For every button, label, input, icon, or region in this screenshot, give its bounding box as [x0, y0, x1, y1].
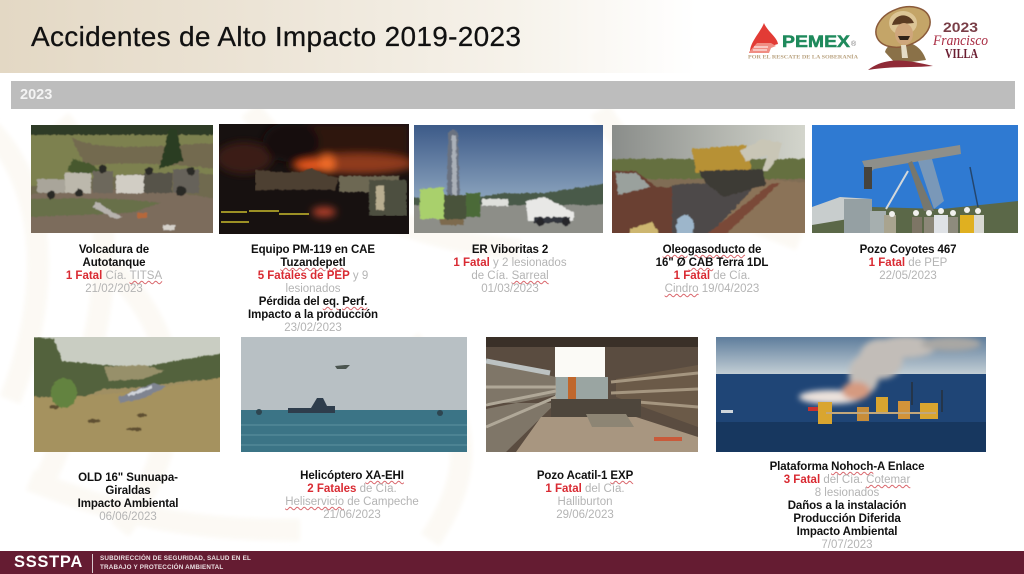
title: Accidentes de Alto Impacto 2019-2023: [31, 21, 521, 52]
caption: Equipo PM-119: Tuzandepetl: [280, 257, 346, 269]
icon: portrait with sombrero: [868, 0, 936, 70]
icon: Pemex drop and eagle: [749, 23, 778, 53]
logo: 2023 Francisco Villa: [868, 6, 988, 70]
caption: Helicóptero XA-EHI: [285, 470, 419, 521]
caption: Oleogasoducto: 16" Ø CAB Terra 1DL: [656, 257, 768, 269]
caption: OLD 16 Sunuapa-Giraldas: Giraldas: [105, 485, 151, 497]
caption: ER Viboritas 2: [453, 244, 567, 295]
photo: Pozo Acatil interior: [486, 337, 698, 452]
caption: Volcadura de Autotanque: [66, 244, 162, 295]
caption: Plataforma Nohoch-A Enlace: Impacto Ambiental: [797, 526, 897, 538]
caption: Equipo PM-119: Pérdida del eq. Perf.: [259, 296, 367, 308]
caption: Pozo Acatil-1 EXP: Pozo Acatil-1 EXP: [537, 470, 633, 482]
caption: ER Viboritas 2: ER Viboritas 2: [472, 244, 548, 256]
caption: Pozo Coyotes 467: [860, 244, 956, 282]
caption: Helicóptero XA-EHI: Helicóptero XA-EHI: [300, 470, 404, 482]
footer acronym: SSSTPA: [14, 553, 83, 571]
footer description: TRABAJO Y PROTECCIÓN AMBIENTAL: [100, 564, 223, 570]
caption: Oleogasoducto: [656, 244, 768, 298]
caption: Helicóptero XA-EHI: 21/06/2023: [323, 509, 381, 521]
footer divider: [92, 554, 93, 573]
caption: Plataforma Nohoch-A Enlace: 7/07/2023: [821, 539, 873, 551]
wordmark: PEMEX: [782, 32, 851, 51]
photo: pumpjack at Pozo Coyotes: [812, 125, 1018, 233]
caption: OLD 16 Sunuapa-Giraldas: OLD 16" Sunuapa-: [78, 472, 178, 484]
caption: Plataforma Nohoch-A Enlace: Daños a la instalación: [788, 500, 906, 512]
surname: VILLA: [945, 46, 978, 61]
caption: Equipo PM-119: lesionados: [286, 283, 340, 295]
year: 2023: [943, 19, 978, 35]
caption: Pozo Acatil-1 EXP: 1 Fatal del Cía.: [545, 483, 625, 495]
caption: Pozo Acatil-1 EXP: 29/06/2023: [556, 509, 614, 521]
photo: OLD 16 pipeline right of way: [34, 337, 220, 452]
photo: PM-119 rig fire at night: [219, 124, 409, 234]
footer bar: [0, 551, 1024, 574]
photo: overturned tanker: [31, 125, 213, 233]
caption: Pozo Coyotes 467: 22/05/2023: [879, 270, 937, 282]
caption: Equipo PM-119: 5 Fatales de PEP y 9: [258, 270, 368, 282]
caption: Helicóptero XA-EHI: 2 Fatales de Cía.: [307, 483, 397, 495]
photo: helicopter and vessel at sea: [241, 337, 467, 452]
caption: Pozo Acatil-1 EXP: Halliburton: [558, 496, 612, 508]
year label: 2023: [20, 87, 52, 103]
caption: Volcadura de Autotanque: Volcadura de: [79, 244, 149, 256]
caption: Oleogasoducto: Oleogasoducto de: [663, 244, 761, 256]
caption: Volcadura de Autotanque: 21/02/2023: [85, 283, 143, 295]
caption: Equipo PM-119: Equipo PM-119 en CAE: [251, 244, 375, 256]
caption: ER Viboritas 2: 01/03/2023: [481, 283, 539, 295]
caption: Plataforma Nohoch-A Enlace: 3 Fatal del Cía. Cotemar: [784, 474, 910, 486]
logo: Pemex: [748, 23, 858, 60]
photo: excavator over pipeline: [612, 125, 805, 233]
caption: Plataforma Nohoch-A Enlace: 8 lesionados: [815, 487, 879, 499]
caption: Volcadura de Autotanque: 1 Fatal Cía. TITSA: [66, 270, 162, 282]
caption: ER Viboritas 2: de Cía. Sarreal: [471, 270, 549, 282]
caption: Equipo PM-119: Impacto a la producción: [248, 309, 378, 321]
footer description: [100, 554, 251, 570]
caption: OLD 16 Sunuapa-Giraldas: 06/06/2023: [99, 511, 157, 523]
caption: OLD 16 Sunuapa-Giraldas: [78, 472, 178, 523]
caption: Oleogasoducto: 1 Fatal de Cía.: [674, 270, 750, 282]
caption: Plataforma Nohoch-A Enlace: [770, 461, 924, 551]
caption: Volcadura de Autotanque: Autotanque: [83, 257, 145, 269]
caption: Equipo PM-119: 23/02/2023: [284, 322, 342, 334]
caption: Pozo Coyotes 467: Pozo Coyotes 467: [860, 244, 956, 256]
caption: Equipo PM-119: [248, 244, 378, 334]
caption: Plataforma Nohoch-A Enlace: Producción Diferida: [793, 513, 901, 525]
script name: Francisco: [932, 33, 988, 49]
caption: ER Viboritas 2: 1 Fatal y 2 lesionados: [453, 257, 567, 269]
caption: Pozo Acatil-1 EXP: [537, 470, 634, 521]
tagline: POR EL RESCATE DE LA SOBERANÍA: [748, 52, 858, 60]
caption: Helicóptero XA-EHI: Heliservicio de Campeche: [285, 496, 419, 508]
caption: OLD 16 Sunuapa-Giraldas: Impacto Ambiental: [78, 498, 178, 510]
year bar: [11, 81, 1015, 109]
caption: Pozo Coyotes 467: 1 Fatal de PEP: [869, 257, 947, 269]
header band: [0, 0, 1024, 73]
footer description: SUBDIRECCIÓN DE SEGURIDAD, SALUD EN EL: [100, 555, 251, 562]
caption: Plataforma Nohoch-A Enlace: Plataforma Nohoch-A Enlace: [770, 461, 924, 473]
photo: Nohoch-A platform fire: [716, 337, 986, 452]
photo: drilling rig at ER Viboritas: [414, 125, 603, 233]
registered mark: ®: [851, 40, 857, 48]
caption: Oleogasoducto: Cindro 19/04/2023: [665, 283, 759, 295]
